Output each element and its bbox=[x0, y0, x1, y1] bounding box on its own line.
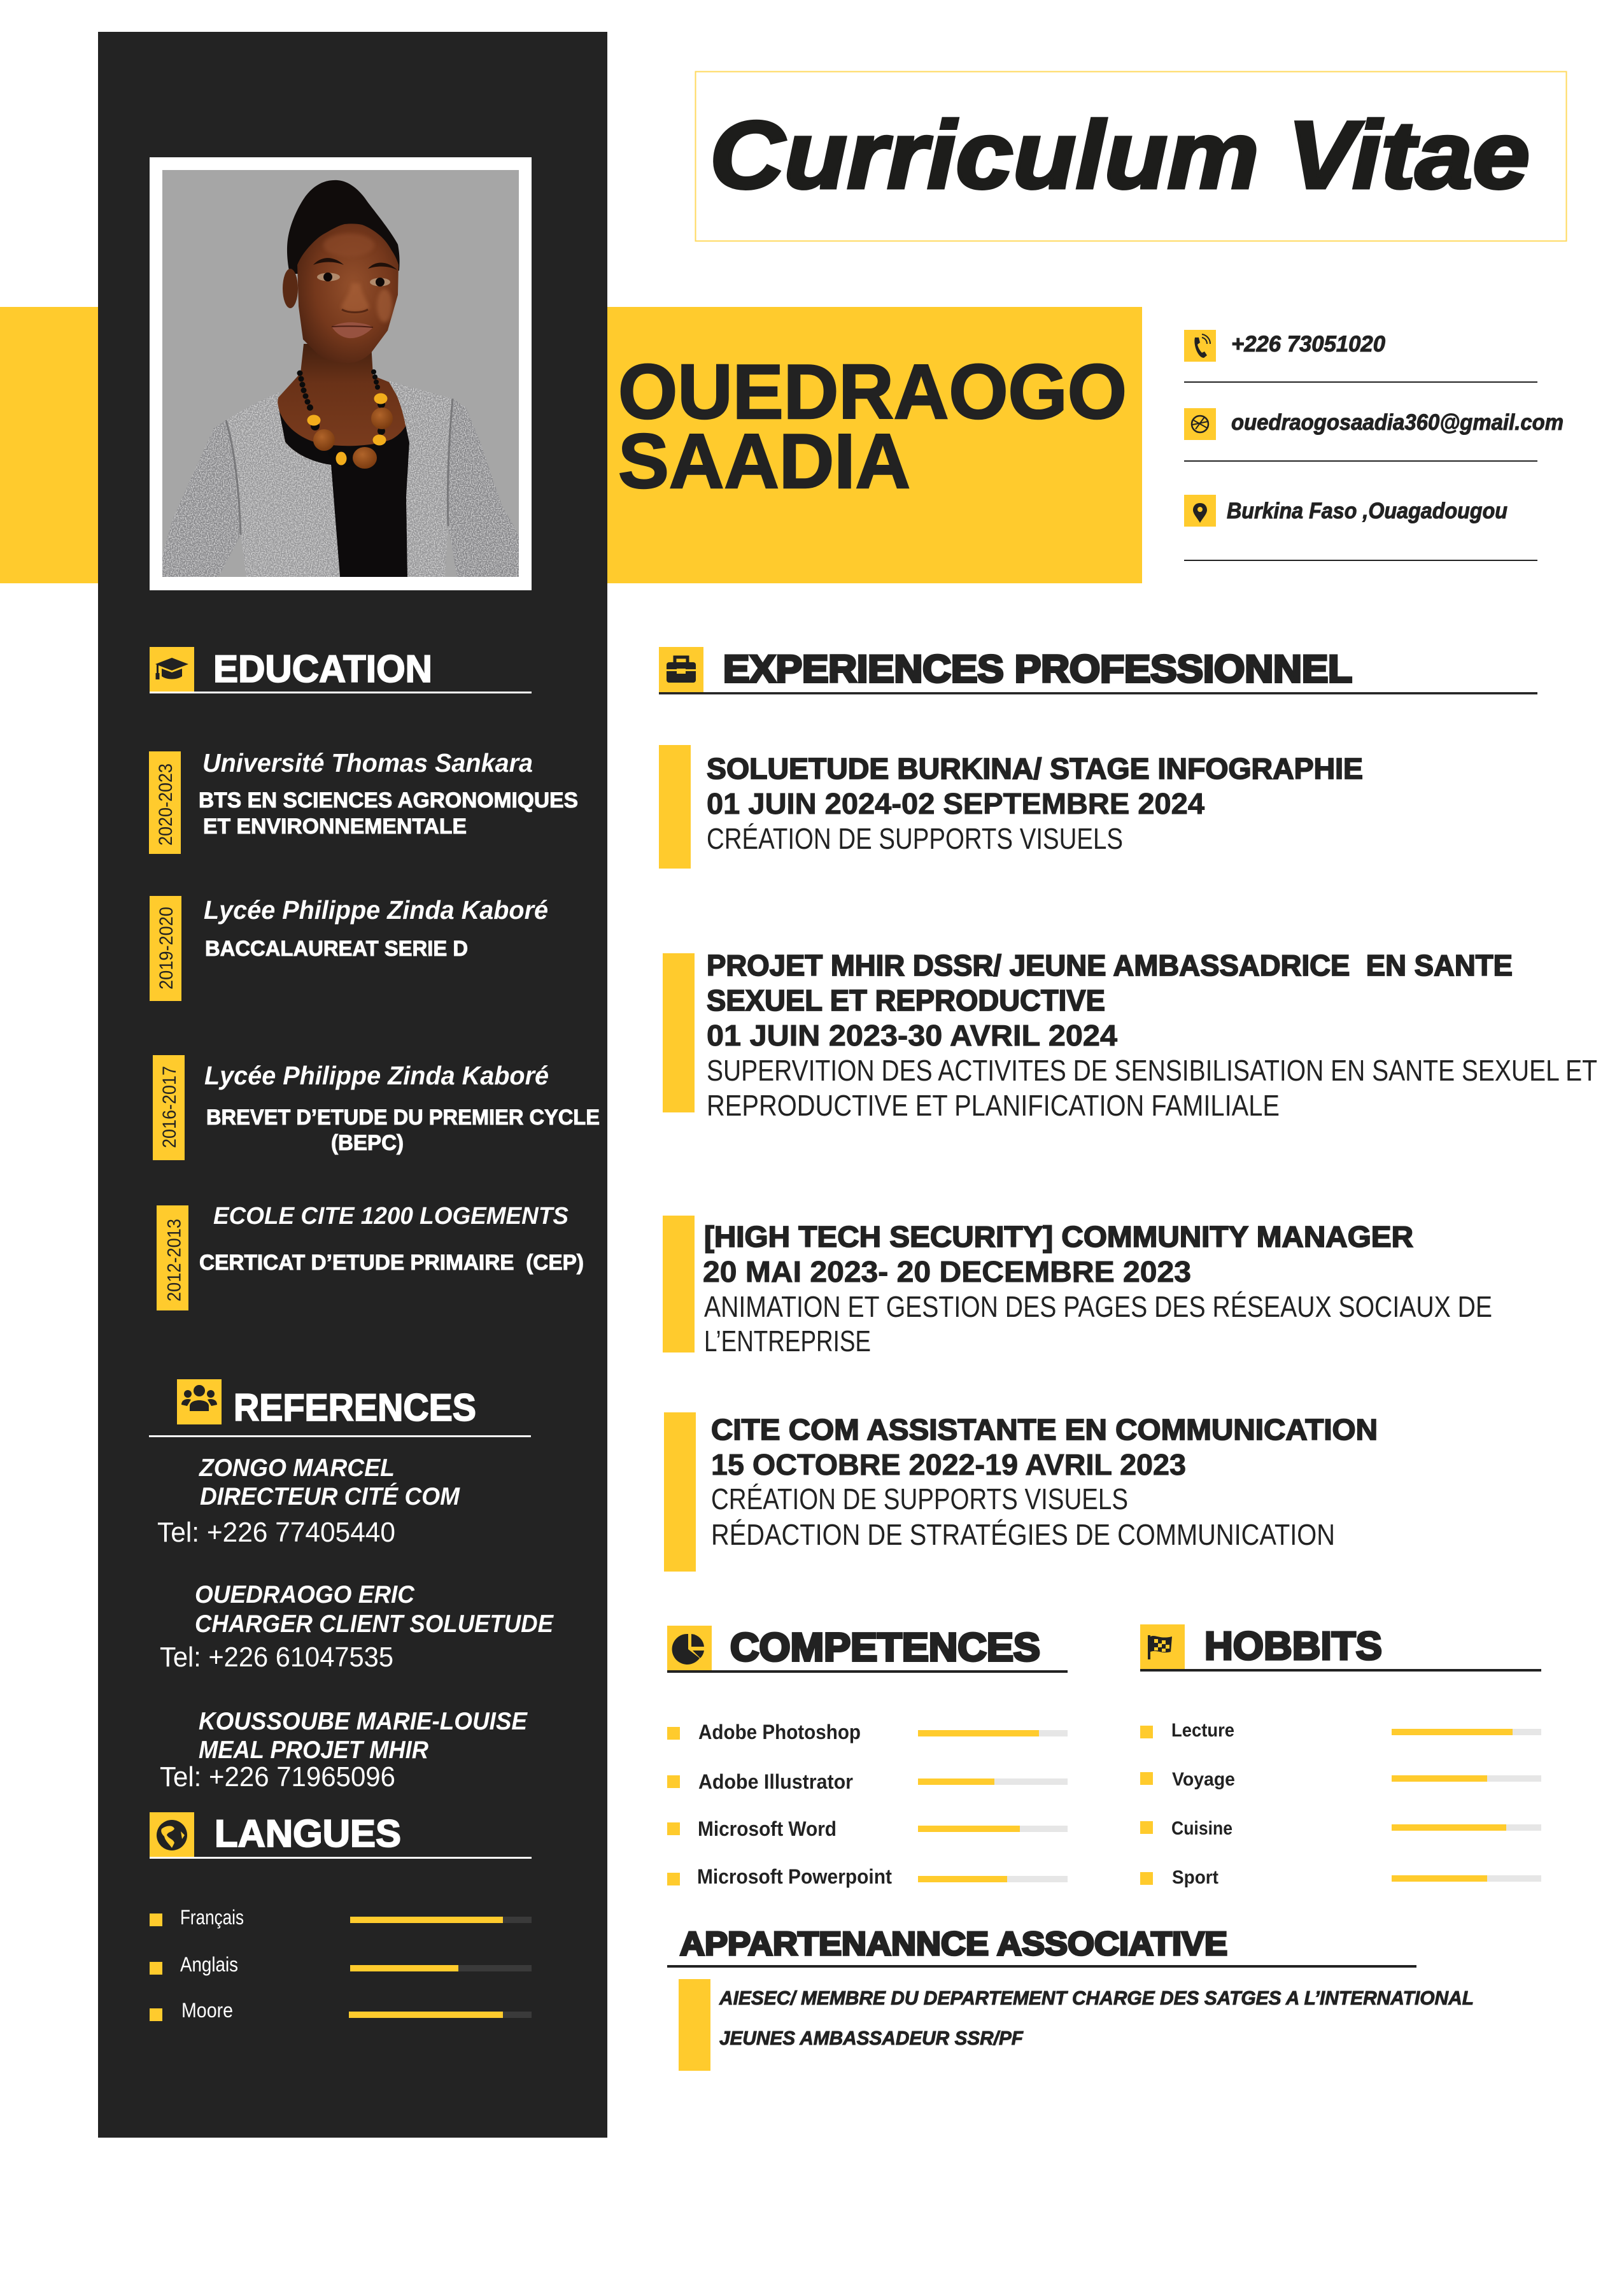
entry 2020-2023 bbox=[149, 748, 578, 854]
heading: LANGUES bbox=[215, 1812, 401, 1855]
black top bbox=[279, 410, 415, 577]
contact: phone: +226 73051020 bbox=[1231, 332, 1386, 357]
reference 2: OUEDRAOGO ERIC bbox=[195, 1581, 415, 1608]
skill: Adobe Illustrator: Adobe Illustrator bbox=[698, 1770, 853, 1793]
section: competences bbox=[667, 1626, 1068, 1888]
reference 2: CHARGER CLIENT SOLUETUDE bbox=[195, 1610, 554, 1638]
jacket right body bbox=[389, 381, 453, 577]
language: Moore: Moore bbox=[181, 1999, 233, 2022]
reference 3 bbox=[160, 1708, 528, 1793]
language: Français: Français bbox=[180, 1906, 244, 1929]
skill: Adobe Photoshop bbox=[667, 1721, 1068, 1743]
skill: Microsoft Powerpoint: Microsoft Powerpoint bbox=[697, 1865, 892, 1888]
icon: people bbox=[177, 1379, 222, 1424]
cheek highlights bbox=[377, 289, 392, 322]
jacket seams bbox=[226, 399, 453, 535]
experience 3: L’ENTREPRISE bbox=[704, 1324, 871, 1358]
experience 3: [HIGH TECH SECURITY] COMMUNITY MANAGER bbox=[704, 1220, 1413, 1253]
accent bar bbox=[679, 1979, 710, 2071]
hobby: Lecture: Lecture bbox=[1171, 1720, 1234, 1741]
section: hobbies bbox=[1140, 1624, 1541, 1888]
experience 3 bbox=[663, 1216, 1492, 1358]
language: Anglais bbox=[150, 1953, 532, 1976]
hobby: Voyage: Voyage bbox=[1172, 1769, 1235, 1790]
contact: phone bbox=[1184, 330, 1537, 383]
language: Anglais: Anglais bbox=[180, 1953, 238, 1976]
hair bbox=[287, 180, 400, 274]
experience 1: SOLUETUDE BURKINA/ STAGE INFOGRAPHIE bbox=[707, 752, 1363, 785]
experience 1: 01 JUIN 2024-02 SEPTEMBRE 2024 bbox=[707, 787, 1204, 820]
icon: globe bbox=[150, 1812, 194, 1857]
experience 3: ANIMATION ET GESTION DES PAGES DES RÉSEAUX SOCIAUX DE bbox=[704, 1290, 1492, 1323]
experience 4: RÉDACTION DE STRATÉGIES DE COMMUNICATION bbox=[711, 1518, 1335, 1551]
contact: location bbox=[1184, 495, 1537, 561]
surname: OUEDRAOGO bbox=[618, 348, 1127, 435]
heading: COMPETENCES bbox=[730, 1626, 1040, 1670]
jacket right sleeve bbox=[448, 399, 519, 577]
experience 4: CITE COM ASSISTANTE EN COMMUNICATION bbox=[711, 1413, 1378, 1446]
face bbox=[297, 224, 399, 363]
experience 2 bbox=[663, 949, 1597, 1122]
entry 2016-2017: (BEPC) bbox=[331, 1131, 404, 1155]
heading: REFERENCES bbox=[234, 1386, 476, 1429]
icon: pie chart bbox=[667, 1626, 712, 1671]
entry 2019-2020: Lycée Philippe Zinda Kaboré bbox=[204, 895, 548, 925]
entry 2016-2017: 2016-2017 bbox=[159, 1066, 180, 1148]
entry 2012-2013 bbox=[157, 1203, 584, 1310]
entry 2016-2017: BREVET D’ETUDE DU PREMIER CYCLE bbox=[206, 1105, 600, 1130]
entry 2016-2017 bbox=[153, 1055, 600, 1160]
experience 2: 01 JUIN 2023-30 AVRIL 2024 bbox=[707, 1019, 1117, 1052]
entry 2020-2023: ET ENVIRONNEMENTALE bbox=[203, 814, 467, 839]
contact: email bbox=[1184, 408, 1564, 462]
experience 2: PROJET MHIR DSSR/ JEUNE AMBASSADRICE EN SANTE bbox=[707, 949, 1513, 982]
experience 2: SEXUEL ET REPRODUCTIVE bbox=[707, 984, 1105, 1017]
heading: APPARTENANNCE ASSOCIATIVE bbox=[680, 1926, 1227, 1963]
entry 2016-2017: Lycée Philippe Zinda Kaboré bbox=[204, 1061, 549, 1090]
association 1: AIESEC/ MEMBRE DU DEPARTEMENT CHARGE DES SATGES A L’INTERNATIONAL bbox=[719, 1987, 1474, 2009]
entry 2012-2013: ECOLE CITE 1200 LOGEMENTS bbox=[213, 1203, 568, 1230]
skill: Microsoft Word bbox=[667, 1817, 1068, 1840]
entry 2019-2020 bbox=[150, 895, 548, 1001]
left yellow band bbox=[0, 307, 98, 583]
association 2: JEUNES AMBASSADEUR SSR/PF bbox=[719, 2027, 1024, 2049]
reference 1 bbox=[157, 1454, 460, 1548]
jacket bbox=[162, 381, 519, 577]
hobby: Sport bbox=[1140, 1867, 1541, 1888]
section: references bbox=[149, 1379, 554, 1793]
language: Moore bbox=[150, 1999, 532, 2022]
section: languages bbox=[150, 1812, 532, 2022]
hobby: Lecture bbox=[1140, 1720, 1541, 1741]
language: Français bbox=[150, 1906, 532, 1929]
entry 2012-2013: CERTICAT D’ETUDE PRIMAIRE (CEP) bbox=[199, 1251, 584, 1275]
nose bbox=[341, 283, 369, 312]
entry 2020-2023: BTS EN SCIENCES AGRONOMIQUES bbox=[199, 788, 578, 813]
panel: sidebar background bbox=[98, 32, 607, 2138]
section: experiences bbox=[659, 647, 1597, 1572]
reference 2 bbox=[160, 1581, 554, 1673]
icon: graduation cap bbox=[150, 647, 194, 692]
section: education bbox=[149, 647, 600, 1310]
entry 2020-2023: Université Thomas Sankara bbox=[202, 748, 533, 777]
experience 3: 20 MAI 2023- 20 DECEMBRE 2023 bbox=[703, 1255, 1191, 1288]
icon: briefcase bbox=[659, 647, 703, 692]
first name: SAADIA bbox=[618, 418, 910, 504]
heading: HOBBITS bbox=[1204, 1624, 1382, 1668]
reference 2: Tel: +226 61047535 bbox=[160, 1642, 393, 1673]
heading: EXPERIENCES PROFESSIONNEL bbox=[723, 648, 1352, 690]
experience 4 bbox=[664, 1412, 1378, 1572]
section: associations bbox=[667, 1926, 1474, 2071]
hobby: Cuisine bbox=[1140, 1818, 1541, 1839]
entry 2019-2020: 2019-2020 bbox=[156, 907, 177, 990]
hobby: Sport: Sport bbox=[1172, 1867, 1218, 1888]
experience 1 bbox=[659, 745, 1363, 869]
jacket left body bbox=[226, 392, 340, 577]
contact block bbox=[1184, 330, 1564, 561]
reference 1: DIRECTEUR CITÉ COM bbox=[200, 1482, 460, 1510]
jacket left sleeve bbox=[162, 420, 241, 577]
reference 3: KOUSSOUBE MARIE-LOUISE bbox=[199, 1708, 528, 1735]
experience 1: CRÉATION DE SUPPORTS VISUELS bbox=[707, 822, 1123, 855]
eyebrows bbox=[313, 258, 344, 265]
reference 1: Tel: +226 77405440 bbox=[157, 1517, 395, 1548]
eyes bbox=[317, 273, 340, 281]
necklace beads bbox=[313, 429, 335, 451]
icon: flag bbox=[1140, 1624, 1185, 1670]
heading: EDUCATION bbox=[213, 648, 432, 690]
skill: Microsoft Word: Microsoft Word bbox=[698, 1817, 837, 1840]
portrait photo bbox=[150, 157, 532, 590]
experience 2: REPRODUCTIVE ET PLANIFICATION FAMILIALE bbox=[707, 1089, 1280, 1122]
skill: Adobe Illustrator bbox=[667, 1770, 1068, 1793]
reference 3: MEAL PROJET MHIR bbox=[199, 1736, 428, 1764]
experience 4: CRÉATION DE SUPPORTS VISUELS bbox=[711, 1482, 1128, 1516]
contact: email: ouedraogosaadia360@gmail.com bbox=[1231, 410, 1564, 435]
skill: Microsoft Powerpoint bbox=[667, 1865, 1068, 1888]
hobby: Voyage bbox=[1140, 1769, 1541, 1790]
name banner bbox=[607, 307, 1142, 583]
neck and chest bbox=[275, 344, 414, 458]
necklace strand bbox=[297, 369, 385, 467]
reference 1: ZONGO MARCEL bbox=[199, 1454, 395, 1482]
contact: location: Burkina Faso ,Ouagadougou bbox=[1227, 499, 1507, 523]
title: Curriculum Vitae bbox=[710, 101, 1530, 208]
entry 2019-2020: BACCALAUREAT SERIE D bbox=[205, 937, 468, 961]
ear bbox=[283, 269, 298, 308]
title box bbox=[695, 71, 1566, 241]
experience 4: 15 OCTOBRE 2022-19 AVRIL 2023 bbox=[711, 1448, 1186, 1481]
entry 2012-2013: 2012-2013 bbox=[164, 1219, 185, 1302]
skill: Adobe Photoshop: Adobe Photoshop bbox=[698, 1721, 861, 1743]
reference 3: Tel: +226 71965096 bbox=[160, 1761, 395, 1793]
lips bbox=[332, 322, 373, 338]
entry 2020-2023: 2020-2023 bbox=[155, 763, 176, 846]
hobby: Cuisine: Cuisine bbox=[1171, 1818, 1232, 1839]
